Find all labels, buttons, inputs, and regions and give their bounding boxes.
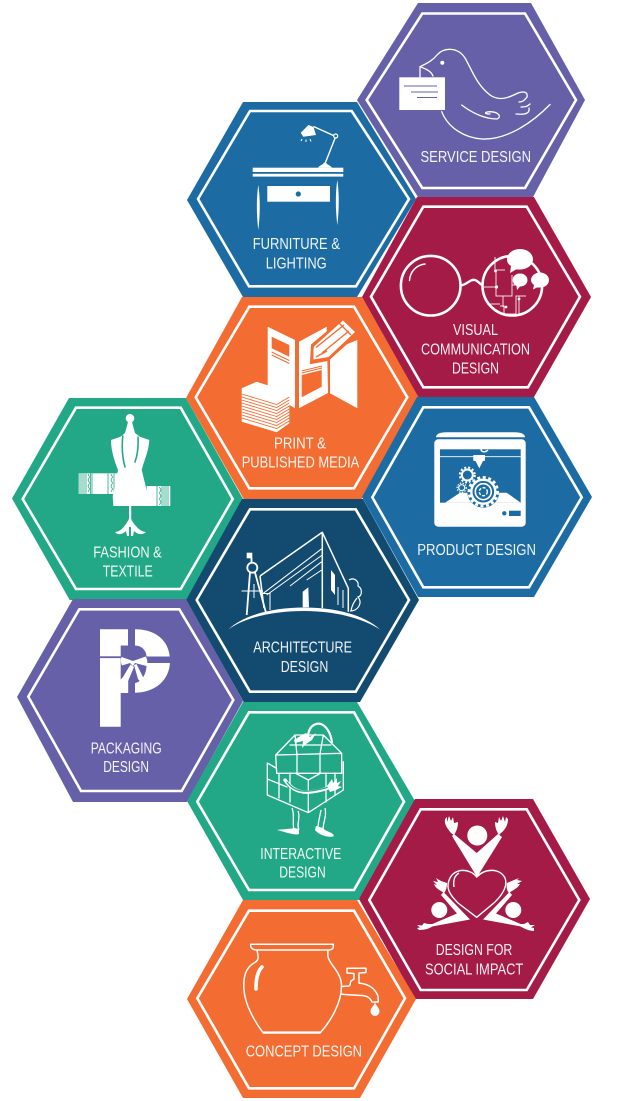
label: furniture and lighting: FURNITURE & [253, 236, 340, 253]
label: visual communication design: COMMUNICATION [421, 342, 530, 359]
icon: three figures around a heart [417, 816, 535, 931]
label: interactive design [260, 846, 341, 882]
label: interactive design: INTERACTIVE [260, 846, 341, 863]
label: design for social impact: SOCIAL IMPACT [425, 961, 523, 978]
panel: fashion and textile [12, 398, 243, 600]
label: visual communication design [421, 322, 530, 378]
label: service design: SERVICE DESIGN [420, 149, 531, 166]
label: concept design: CONCEPT DESIGN [246, 1044, 362, 1061]
label: print and published media: PRINT & [274, 435, 326, 452]
label: design for social impact: DESIGN FOR [436, 942, 512, 959]
label: architecture design: ARCHITECTURE [253, 639, 352, 656]
label: design for social impact [425, 942, 523, 978]
icon: letter P tied with a bow [100, 629, 172, 727]
label: interactive design: DESIGN [279, 864, 326, 881]
label: print and published media: PUBLISHED MEDIA [242, 454, 360, 471]
panel: print and published media [186, 297, 419, 499]
panel: furniture and lighting [187, 102, 416, 297]
label: packaging design [91, 740, 162, 776]
icon: brochure, pencil and paper stack [242, 319, 358, 432]
icon: building with drafting compass [228, 532, 380, 630]
label: architecture design: DESIGN [281, 659, 328, 676]
label: visual communication design: VISUAL [453, 322, 498, 339]
label: furniture and lighting [253, 236, 340, 272]
panel: service design [357, 3, 585, 197]
icon: pot with tap [244, 944, 380, 1033]
label: packaging design: PACKAGING [91, 740, 162, 757]
panel: visual communication design [362, 197, 591, 397]
panel: packaging design [17, 599, 243, 802]
icon: bird carrying a letter [399, 49, 550, 139]
icon: dress form with fabric [79, 414, 170, 536]
icon: glasses with circuit and speech bubbles [401, 249, 549, 316]
panel: architecture design [186, 499, 419, 702]
panel: design for social impact [359, 799, 590, 999]
label: furniture and lighting: LIGHTING [266, 255, 327, 272]
panel: product design [362, 397, 592, 597]
panel: concept design [187, 900, 416, 1098]
panel: interactive design [187, 702, 415, 900]
icon: gift box character [267, 724, 343, 837]
label: packaging design: DESIGN [103, 759, 149, 776]
label: print and published media [242, 436, 360, 472]
label: visual communication design: DESIGN [452, 360, 499, 377]
icon: 3D printer [434, 432, 526, 527]
label: fashion and textile: FASHION & [93, 544, 162, 561]
label: fashion and textile: TEXTILE [103, 563, 153, 580]
label: architecture design [253, 640, 352, 676]
label: fashion and textile [93, 544, 162, 580]
icon: desk with lamp [253, 125, 343, 230]
label: product design: PRODUCT DESIGN [417, 542, 536, 559]
